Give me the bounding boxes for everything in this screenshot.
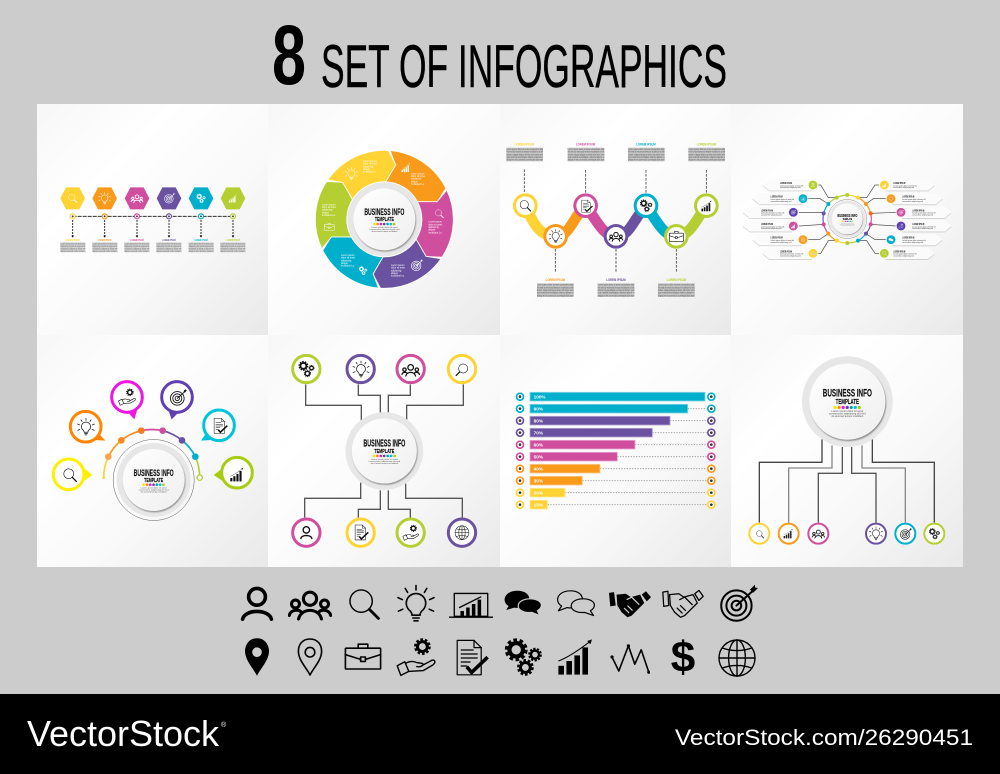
tree lines [759, 439, 934, 523]
arc [102, 427, 202, 480]
tab captions: LOREM IPSUM [780, 183, 792, 185]
bubble document [201, 410, 234, 441]
hub badge [345, 412, 423, 490]
wheel segments [296, 132, 472, 307]
center badge [828, 199, 867, 238]
tab captions: LOREM IPSUM [893, 251, 905, 253]
step 2 bulb [92, 187, 118, 253]
icon set row 1 [243, 585, 758, 621]
panel: hub and spokes [268, 335, 500, 567]
bubble hand [112, 382, 142, 419]
tab node icons [791, 183, 904, 255]
bar labels: 40% [534, 466, 544, 471]
center badge: BUSINESS INFO [364, 207, 404, 217]
step 4 target: LOREM IPSUM [162, 238, 176, 242]
icon set row 2 [245, 633, 755, 682]
top badge [802, 356, 893, 447]
step 1 search [60, 187, 86, 253]
tab captions: LOREM IPSUM [761, 224, 773, 226]
tree nodes [749, 524, 944, 544]
wheel icons and captions [322, 160, 443, 278]
bubble target [162, 382, 192, 419]
bar labels: 20% [534, 490, 544, 495]
wave captions: LOREM IPSUM [667, 277, 686, 282]
wave captions: LOREM IPSUM [636, 141, 656, 146]
tab captions: LOREM IPSUM [761, 210, 773, 212]
bubble bulb [70, 411, 105, 442]
wave captions: LOREM IPSUM [606, 277, 626, 282]
hub badge: TEMPLATE [374, 449, 394, 455]
step 1 search: LOREM IPSUM [66, 238, 80, 242]
panel: percentage bar chart [500, 335, 731, 567]
tab captions: LOREM IPSUM [902, 238, 914, 240]
ring dots [822, 193, 873, 245]
bar labels: 50% [534, 454, 544, 459]
wave connectors [525, 206, 706, 236]
dashed leaders [524, 169, 706, 272]
center badge: TEMPLATE [144, 478, 163, 484]
center badge: BUSINESS INFO [837, 213, 858, 218]
bar labels: 80% [534, 418, 544, 423]
step 6 chart [220, 187, 246, 253]
tab nodes [789, 180, 906, 258]
footer bar: VectorStock [27, 713, 220, 754]
panel: hexagon timeline [37, 104, 268, 335]
wave captions: LOREM IPSUM [697, 141, 716, 146]
title: SET OF INFOGRAPHICS [321, 33, 727, 100]
dotted guides [548, 409, 707, 505]
center badge [113, 439, 194, 520]
center badge: BUSINESS INFO [134, 468, 174, 478]
wave captions [506, 141, 725, 297]
title: 8 [272, 8, 306, 102]
spoke icons [299, 361, 469, 540]
tab captions: LOREM IPSUM [902, 197, 914, 199]
tab captions: LOREM IPSUM [780, 251, 792, 253]
bars [530, 392, 705, 509]
node rings [513, 193, 719, 249]
icon set row 2: $ [671, 633, 695, 682]
spoke nodes [293, 355, 476, 546]
connector lines [799, 185, 896, 253]
bar labels: 70% [534, 430, 544, 435]
wave captions: LOREM IPSUM [576, 141, 596, 146]
footer bar: ® [221, 721, 227, 729]
center badge: TEMPLATE [375, 217, 394, 223]
tab captions: LOREM IPSUM [912, 210, 924, 212]
bar labels: 10% [534, 502, 544, 507]
spokes [305, 384, 463, 518]
step 3 users [124, 187, 150, 253]
tab captions: LOREM IPSUM [771, 197, 783, 199]
panel: speech bubble arc [37, 335, 268, 567]
bubble chart [214, 457, 252, 488]
panel: radial tabs [731, 104, 963, 335]
end dots [516, 392, 716, 509]
panel: org tree [731, 335, 963, 567]
bar labels [534, 394, 546, 507]
center badge: TEMPLATE [843, 217, 852, 221]
step 5 gears [189, 187, 214, 253]
top badge: BUSINESS INFO [823, 388, 872, 400]
tab captions: LOREM IPSUM [912, 224, 924, 226]
tab captions [761, 183, 936, 257]
bar labels: 100% [534, 394, 546, 399]
step 3 users: LOREM IPSUM [130, 238, 144, 242]
wave captions: LOREM IPSUM [546, 277, 565, 282]
bar labels: 60% [534, 442, 544, 447]
panel: wave timeline [500, 104, 731, 335]
step 4 target [156, 187, 182, 253]
hub badge: BUSINESS INFO [363, 439, 406, 450]
step 2 bulb: LOREM IPSUM [98, 238, 112, 242]
step 5 gears: LOREM IPSUM [194, 238, 208, 242]
tabs [743, 179, 952, 259]
color ring [823, 195, 871, 243]
tree icons [756, 527, 940, 540]
footer bar [0, 694, 1000, 774]
top badge: TEMPLATE [836, 399, 859, 406]
wave captions: LOREM IPSUM [515, 141, 534, 146]
center badge [347, 182, 422, 257]
footer bar: VectorStock.com/26290451 [675, 725, 973, 750]
bar labels: 90% [534, 406, 544, 411]
step 6 chart: LOREM IPSUM [226, 238, 240, 242]
bar labels: 30% [534, 478, 544, 483]
bubble search [53, 459, 92, 490]
title [272, 8, 727, 102]
panel: arrow wheel [268, 104, 500, 335]
tab captions: LOREM IPSUM [771, 238, 783, 240]
tab captions: LOREM IPSUM [893, 183, 905, 185]
